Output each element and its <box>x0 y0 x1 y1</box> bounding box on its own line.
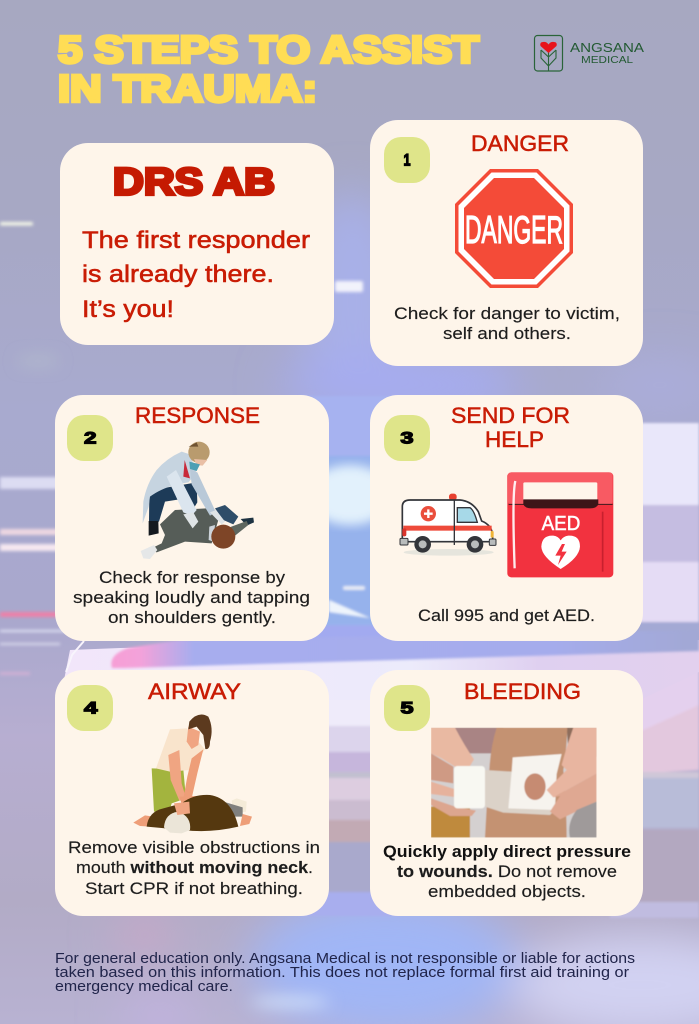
heading: send for help: SEND FOR <box>451 403 570 428</box>
doctor legs <box>149 482 197 522</box>
number badge 4: 4 <box>84 698 98 718</box>
number badge 1 <box>384 137 430 183</box>
disclaimer footer: For general education only. Angsana Medical is not responsible or liable for actions <box>55 951 635 967</box>
heading: airway: AIRWAY <box>148 679 241 704</box>
text: Start CPR if not breathing. <box>85 879 303 898</box>
number badge 5: 5 <box>400 698 414 718</box>
title: IN TRAUMA: <box>58 68 317 110</box>
heading: response: RESPONSE <box>135 403 260 428</box>
panel: step 4 airway <box>55 670 329 916</box>
text <box>394 304 620 343</box>
panel: step 1 danger <box>370 120 643 366</box>
text: Remove visible obstructions in <box>68 838 320 857</box>
icon: danger stop sign <box>455 169 573 288</box>
text: on shoulders gently. <box>108 608 276 627</box>
panel: step 5 bleeding <box>370 670 643 916</box>
ambulance body and blue light band <box>60 630 699 700</box>
number badge 2: 2 <box>84 428 96 448</box>
number badge 3: 3 <box>400 428 414 448</box>
icon: AED box <box>507 472 613 577</box>
number badge 4 <box>67 685 113 731</box>
patient <box>141 505 254 559</box>
text: Check for danger to victim, <box>394 304 620 323</box>
icon: danger stop sign: DANGER <box>465 209 563 252</box>
text: to wounds. Do not remove <box>397 862 617 881</box>
intro text: is already there. <box>82 261 274 288</box>
icon: ambulance <box>400 494 496 556</box>
heading: send for help: HELP <box>485 427 544 452</box>
text: embedded objects. <box>428 882 586 901</box>
text: Check for response by <box>99 568 286 587</box>
illustration: doctor checking a lying patient <box>141 442 254 559</box>
icon: AED box: AED <box>542 513 580 535</box>
illustration: rescuer performing CPR <box>133 715 252 833</box>
text: Quickly apply direct pressure <box>383 842 631 861</box>
disclaimer footer: taken based on this information. This does not replace formal first aid training or <box>55 965 629 981</box>
number badge 5 <box>384 685 430 731</box>
text <box>383 842 631 901</box>
intro text: It’s you! <box>82 296 174 323</box>
text: self and others. <box>443 324 571 343</box>
panel: step 3 send for help <box>370 395 643 641</box>
logo: Angsana Medical: MEDICAL <box>581 55 634 66</box>
panel: step 2 response <box>55 395 329 641</box>
disclaimer footer <box>55 951 635 995</box>
gutter between middle cards and lower cards <box>300 396 400 916</box>
disclaimer footer: emergency medical care. <box>55 979 233 995</box>
heading: bleeding: BLEEDING <box>464 679 581 704</box>
intro text <box>82 227 310 323</box>
heading: danger: DANGER <box>471 131 569 156</box>
number badge 2 <box>67 415 113 461</box>
text <box>68 838 320 898</box>
text <box>73 568 310 627</box>
intro text: The first responder <box>82 227 310 254</box>
title: 5 STEPS TO ASSIST <box>58 30 479 72</box>
text: mouth without moving neck . <box>76 858 313 877</box>
panel: DRS AB intro <box>60 143 334 345</box>
title <box>58 30 479 110</box>
heading: DRS AB: DRS AB <box>113 162 275 204</box>
number badge 1: 1 <box>404 150 410 170</box>
doctor coat <box>143 452 197 523</box>
text: Call 995 and get AED. <box>418 606 595 625</box>
photo: hands bandaging a wounded leg <box>431 728 597 838</box>
logo: Angsana Medical <box>534 36 644 71</box>
text: speaking loudly and tapping <box>73 588 310 607</box>
number badge 3 <box>384 415 430 461</box>
heading: send for help <box>451 403 570 452</box>
logo: Angsana Medical: ANGSANA <box>570 40 644 55</box>
